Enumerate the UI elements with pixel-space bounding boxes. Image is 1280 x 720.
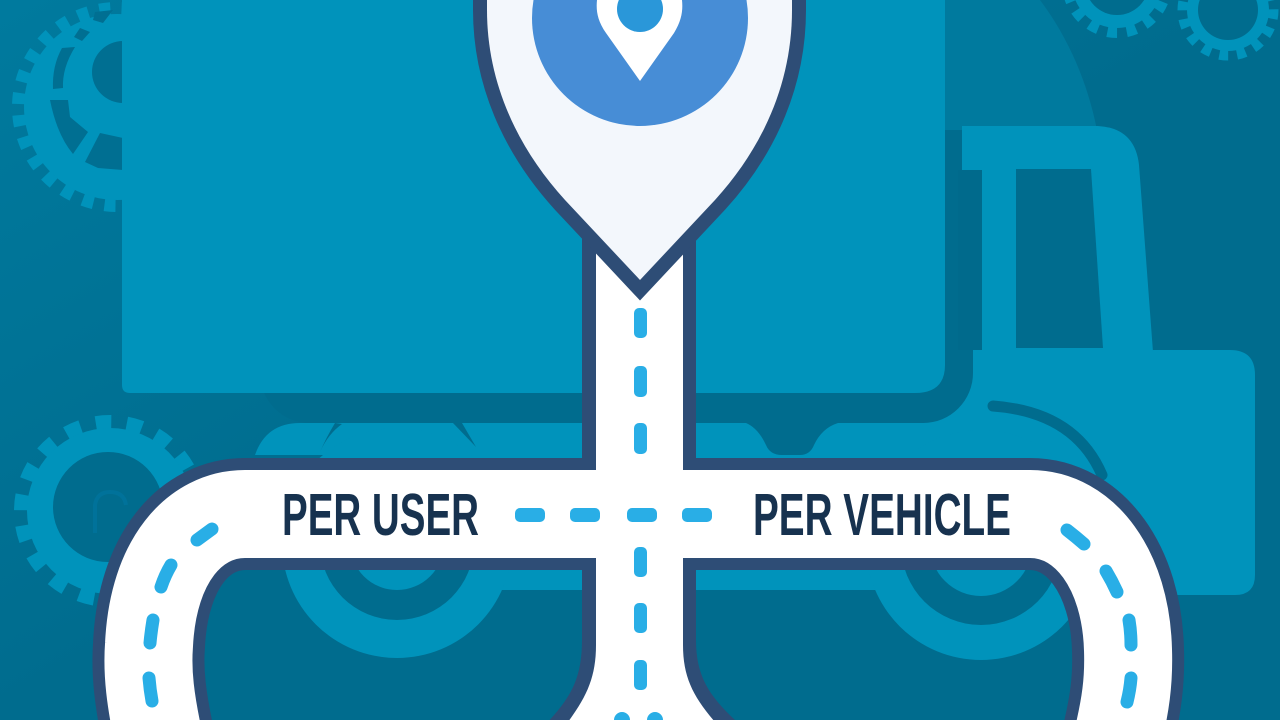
cab frame: [962, 126, 1153, 352]
cab roof shadow: [945, 0, 1097, 130]
lane dashes: [515, 308, 712, 720]
icon: gears top right: [1068, 0, 1273, 55]
right wheel: [866, 430, 1096, 660]
left wheel: [282, 423, 512, 658]
wheel arch stroke: [993, 406, 1102, 475]
cab window: [1016, 169, 1103, 348]
road surface: [148, 514, 1128, 720]
road network: [148, 200, 1131, 720]
icon: gear bottom left: [22, 423, 198, 599]
label: per user: PER USER: [282, 482, 479, 548]
gap between wheels: [746, 423, 838, 455]
cargo box: [122, 0, 945, 393]
dark outline around box: [260, 0, 973, 423]
label: per vehicle: PER VEHICLE: [753, 482, 1011, 548]
road outlines: [148, 514, 1128, 720]
truck chassis and cab body: [255, 350, 1255, 595]
icon: map pin: [487, 0, 792, 280]
icon: gear top left: [19, 9, 215, 205]
